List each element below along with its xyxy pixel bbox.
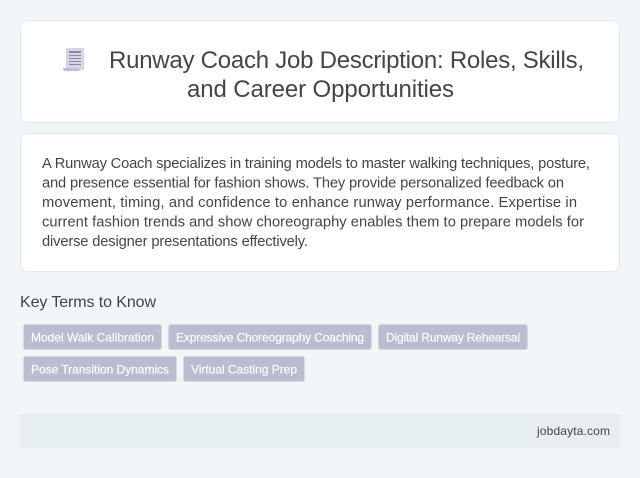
tag: expressive choreography coaching: Expressive Choreography Coaching xyxy=(176,330,364,344)
tag: virtual casting prep: Virtual Casting Prep xyxy=(191,362,297,376)
description text: A Runway Coach specializes in training models to master walking techniques, posture, xyxy=(42,156,590,172)
title: Runway Coach Job Description: Roles, Skills, xyxy=(109,47,584,74)
tag: model walk calibration: Model Walk Calibration xyxy=(31,330,154,344)
footer source text: jobdayta.com xyxy=(536,424,610,438)
description text: and presence essential for fashion shows. They provide personalized feedback on xyxy=(42,176,564,192)
tag group xyxy=(23,324,528,382)
title: and Career Opportunities xyxy=(187,76,454,103)
footer bar xyxy=(20,414,620,448)
tag: pose transition dynamics: Pose Transition Dynamics xyxy=(31,362,169,376)
tag: virtual casting prep xyxy=(183,356,305,382)
icon: paper scroll xyxy=(63,48,84,71)
tag: model walk calibration xyxy=(23,324,162,350)
description text: movement, timing, and confidence to enhance runway performance. Expertise in xyxy=(42,195,577,211)
panel: title card xyxy=(20,20,620,123)
heading: key terms: Key Terms to Know xyxy=(20,294,156,311)
description text: current fashion trends and show choreography enables them to prepare models for xyxy=(42,214,584,230)
tag: pose transition dynamics xyxy=(23,356,177,382)
description text: diverse designer presentations effectively. xyxy=(42,234,308,250)
panel: description xyxy=(20,133,620,272)
title xyxy=(109,47,584,103)
tag: digital runway rehearsal xyxy=(378,324,528,350)
tag: expressive choreography coaching xyxy=(168,324,372,350)
tag: digital runway rehearsal: Digital Runway Rehearsal xyxy=(386,330,520,344)
description text xyxy=(42,156,590,250)
